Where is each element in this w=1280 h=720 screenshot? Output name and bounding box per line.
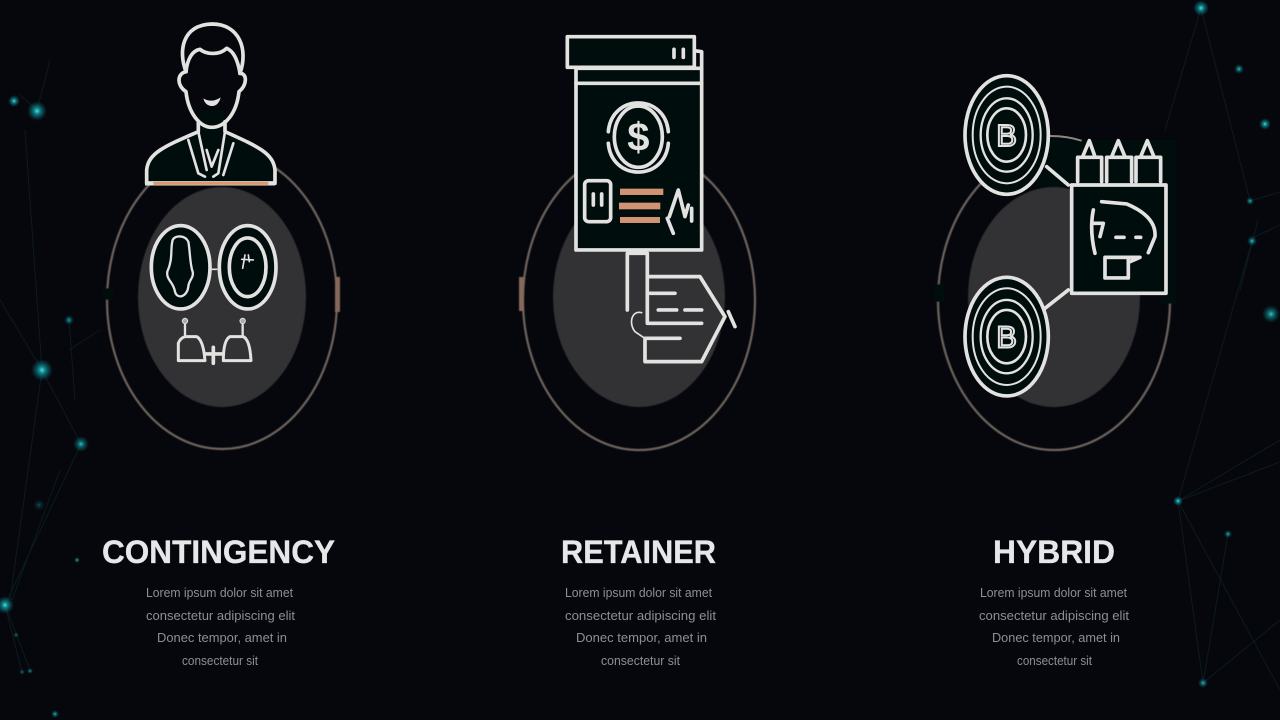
- background network right: [1165, 0, 1280, 690]
- icon: top coin: B: [996, 119, 1017, 153]
- text: contingency description: Lorem ipsum dolor sit amet: [146, 585, 293, 600]
- text: retainer description: Donec tempor, amet in: [576, 630, 707, 645]
- text: contingency description: [146, 585, 295, 668]
- text: hybrid description: consectetur adipiscing elit: [979, 608, 1129, 623]
- heading: hybrid: HYBRID: [993, 534, 1115, 570]
- text: retainer description: [565, 585, 716, 668]
- text: retainer description: Lorem ipsum dolor sit amet: [565, 585, 712, 600]
- text: contingency description: Donec tempor, amet in: [157, 630, 287, 645]
- text: hybrid description: consectetur sit: [1017, 653, 1092, 668]
- icon: invoice document with dollar coin: $: [627, 116, 649, 160]
- text: hybrid description: Lorem ipsum dolor sit amet: [980, 585, 1127, 600]
- icon: pointing tag: [627, 253, 735, 362]
- icon: two coins and connected nodes: [151, 226, 276, 363]
- heading: retainer: RETAINER: [561, 534, 716, 570]
- panel: contingency: [102, 24, 340, 668]
- icon: consultant person: [145, 24, 275, 184]
- ring and disc: retainer: [519, 150, 755, 450]
- text: contingency description: consectetur sit: [182, 653, 258, 668]
- ring and disc: contingency: [103, 151, 340, 449]
- panel: retainer: [519, 37, 755, 668]
- panel: hybrid: [934, 76, 1176, 668]
- text: retainer description: consectetur adipiscing elit: [565, 608, 716, 623]
- text: contingency description: consectetur adipiscing elit: [146, 608, 295, 623]
- heading: contingency: CONTINGENCY: [102, 534, 335, 570]
- text: hybrid description: [979, 585, 1129, 668]
- text: retainer description: consectetur sit: [601, 653, 680, 668]
- icon: coins linked to printer box: [965, 76, 1166, 396]
- icon: top coin: [965, 76, 1048, 194]
- text: hybrid description: Donec tempor, amet in: [992, 630, 1120, 645]
- icon: invoice document with dollar coin: [567, 37, 735, 362]
- icon: bottom coin: [965, 277, 1048, 396]
- background network left: [0, 60, 100, 718]
- ring and disc: hybrid: [934, 140, 1176, 450]
- icon: bottom coin: B: [996, 321, 1017, 355]
